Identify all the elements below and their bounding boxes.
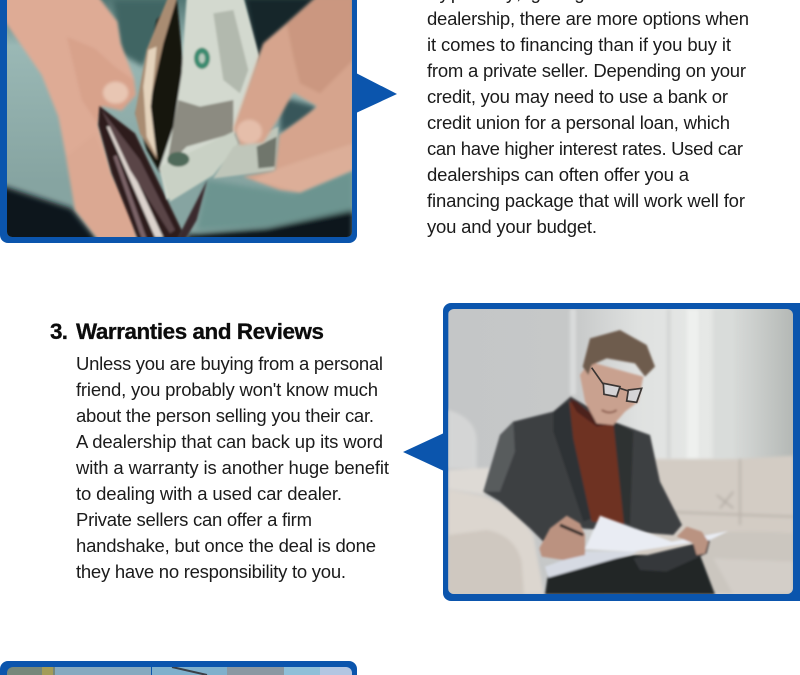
text block: warranties body copy: they have no responsibility to you. [76, 561, 346, 582]
text block: warranties body copy [75, 353, 389, 582]
text block: financing body copy: dealerships can often offer you a [427, 164, 690, 185]
photo frame [0, 661, 357, 675]
hands [539, 516, 585, 560]
heading: 3. Warranties and Reviews: Warranties and Reviews [76, 319, 324, 344]
wallet [98, 106, 207, 240]
photo: building exterior strip [7, 667, 352, 675]
text block: warranties body copy: friend, you probably won't know much [76, 379, 378, 400]
photo: man in blazer reading documents on a sofa [448, 309, 793, 594]
sweater [569, 402, 624, 525]
stack of bills [135, 0, 278, 202]
text block: warranties body copy: to dealing with a used car dealer. [76, 483, 342, 504]
trousers [545, 555, 715, 594]
photo frame [443, 303, 800, 601]
arrow pointing to financing text [356, 73, 397, 113]
text block: financing body copy: financing package that will work well for [427, 190, 745, 211]
text block: financing body copy: can have higher interest rates. Used car [427, 138, 743, 159]
right hand [233, 0, 353, 193]
panel: man reviewing papers photo card [403, 303, 800, 601]
text block: warranties body copy: A dealership that can back up its word [76, 431, 383, 452]
text block: warranties body copy: Unless you are buying from a personal [76, 353, 383, 374]
text block: financing body copy: you and your budget. [427, 216, 597, 237]
panel: wallet photo card [0, 0, 397, 243]
text block: warranties body copy: handshake, but once the deal is done [76, 535, 376, 556]
heading: 3. Warranties and Reviews: 3. [50, 319, 68, 344]
blazer [483, 397, 682, 542]
sofa [633, 456, 793, 594]
glasses [592, 368, 642, 402]
head [580, 362, 643, 425]
papers [585, 516, 728, 552]
text block: financing body copy [427, 0, 749, 237]
photo frame [0, 0, 357, 243]
panel: bottom photo card, cropped at page edge [0, 661, 357, 675]
clipboard [633, 540, 710, 572]
photo: hands opening a wallet of cash [0, 0, 360, 243]
left hand [0, 0, 137, 240]
arrow pointing to warranties text [403, 433, 444, 471]
text block: warranties body copy: with a warranty is another huge benefit [75, 457, 389, 478]
text block: financing body copy: from a private seller. Depending on your [427, 60, 746, 81]
text block: financing body copy: credit union for a personal loan, which [427, 112, 730, 133]
text block: financing body copy: it comes to financing than if you buy it [427, 34, 731, 55]
armrest [448, 489, 544, 594]
text block: financing body copy: credit, you may need to use a bank or [427, 86, 728, 107]
text block: warranties body copy: Private sellers can offer a firm [76, 509, 312, 530]
text block: financing body copy: dealership, there are more options when [427, 8, 749, 29]
text block: warranties body copy: about the person selling you their car. [76, 405, 374, 426]
